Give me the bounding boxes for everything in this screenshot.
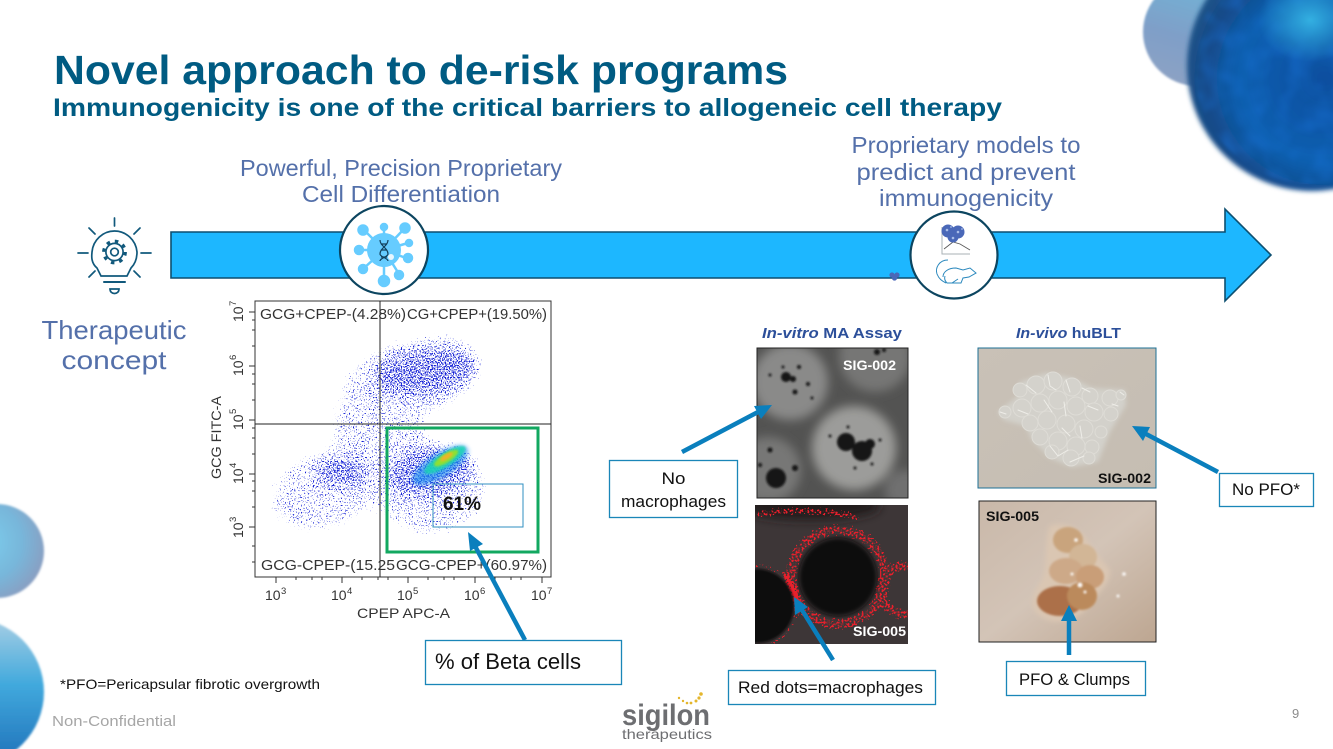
background sphere: left upper xyxy=(0,504,44,598)
label: SIG-005 xyxy=(853,623,906,639)
callout: no PFO: No PFO* xyxy=(1232,480,1300,499)
x axis tick labels: 10 xyxy=(531,587,547,603)
background sphere: top right small xyxy=(1143,0,1251,86)
x axis tick labels: 3 xyxy=(281,586,286,597)
y axis tick labels: 7 xyxy=(228,301,239,306)
title: Novel approach to de-risk programs xyxy=(54,47,788,93)
callout: PFO and clumps xyxy=(1006,662,1146,696)
x axis tick labels: 10 xyxy=(397,587,413,603)
heading: cell differentiation xyxy=(240,155,563,207)
subtitle: Immunogenicity is one of the critical barriers to allogeneic cell therapy xyxy=(53,94,1002,122)
y axis tick labels: 6 xyxy=(228,355,239,360)
callout: PFO and clumps: PFO & Clumps xyxy=(1019,670,1130,689)
arrow: no PFO pointer xyxy=(1132,426,1218,472)
heading: cell differentiation: Cell Differentiation xyxy=(302,181,500,207)
photo: in-vivo SIG-002 xyxy=(978,348,1156,488)
gate labels: GCG-CPEP+(60.97%) xyxy=(396,558,547,574)
panel heading: in-vitro: In-vitro MA Assay xyxy=(762,325,903,342)
callout: red dots xyxy=(728,670,936,704)
x axis tick labels: 10 xyxy=(331,587,347,603)
callout: red dots: Red dots=macrophages xyxy=(738,678,923,697)
green gate xyxy=(387,428,538,552)
y axis tick labels: 10 xyxy=(230,360,246,376)
y axis tick labels: 4 xyxy=(228,463,239,468)
arrow: red dots pointer xyxy=(794,597,833,660)
arrow: PFO and clumps pointer xyxy=(1061,605,1077,655)
icon: virus with DNA xyxy=(340,206,428,294)
photo: in-vitro SIG-002 xyxy=(735,320,925,510)
gate labels: CG+CPEP+(19.50%) xyxy=(407,307,547,323)
icon: light bulb with gear xyxy=(78,218,151,294)
scatter density points xyxy=(252,315,499,553)
callout: no PFO xyxy=(1220,474,1314,506)
flow cytometry chart xyxy=(208,301,552,621)
gate labels: GCG+CPEP-(4.28%) xyxy=(260,307,406,323)
x axis tick labels: 7 xyxy=(547,586,552,597)
confidentiality note: Non-Confidential xyxy=(52,713,176,730)
bead highlights xyxy=(1000,375,1124,462)
y axis tick labels: 10 xyxy=(230,414,246,430)
callout: percent beta cells xyxy=(426,640,622,684)
label: SIG-002 xyxy=(1098,470,1151,486)
icon: model chart and mouse xyxy=(910,212,998,298)
arrow: beta cells pointer xyxy=(468,532,525,640)
heading: proprietary models: predict and prevent xyxy=(856,159,1076,185)
footnote: *PFO=Pericapsular fibrotic overgrowth xyxy=(60,676,320,692)
gate labels xyxy=(260,307,547,574)
x axis tick labels: 10 xyxy=(464,587,480,603)
value box: 61% xyxy=(433,484,523,527)
arrow: no macrophages pointer xyxy=(682,405,772,452)
label: SIG-005 xyxy=(986,508,1039,524)
heading: proprietary models: immunogenicity xyxy=(879,185,1054,211)
background sphere: top right large xyxy=(1187,0,1333,191)
panel heading: in-vivo: In-vivo huBLT xyxy=(1016,325,1121,342)
logo: sigilon therapeutics: sigilon xyxy=(622,699,710,732)
y axis tick labels: 3 xyxy=(228,517,239,522)
x axis title: CPEP APC-A xyxy=(357,605,451,621)
callout: no macrophages xyxy=(610,460,738,518)
y axis tick labels: 10 xyxy=(230,522,246,538)
heading: cell differentiation: Powerful, Precision Proprietary xyxy=(240,155,563,181)
callout: no macrophages: macrophages xyxy=(621,492,726,511)
y axis tick labels: 10 xyxy=(230,306,246,322)
x axis tick labels: 5 xyxy=(413,586,418,597)
density hotspot xyxy=(407,438,474,493)
heading: therapeutic concept xyxy=(42,315,186,375)
gate labels: GCG-CPEP-(15.25 xyxy=(261,558,395,574)
y axis tick labels xyxy=(228,301,246,538)
logo: sigilon therapeutics: therapeutics xyxy=(622,726,712,742)
value box: 61%: 61% xyxy=(443,494,481,515)
y axis tick labels: 5 xyxy=(228,409,239,414)
logo: sigilon therapeutics xyxy=(622,692,712,742)
page number: 9 xyxy=(1292,706,1299,721)
x axis tick labels xyxy=(265,586,552,603)
x axis tick labels: 6 xyxy=(480,586,485,597)
heading: therapeutic concept: Therapeutic xyxy=(42,315,186,345)
heading: proprietary models xyxy=(852,132,1080,211)
x axis tick labels: 4 xyxy=(347,586,352,597)
x axis tick labels: 10 xyxy=(265,587,281,603)
callout: no macrophages: No xyxy=(662,469,686,488)
label: SIG-002 xyxy=(843,357,896,373)
icon: small heart marker on arrow xyxy=(889,272,900,281)
photo: in-vitro SIG-005 xyxy=(717,492,929,646)
timeline arrow xyxy=(171,209,1271,301)
heading: proprietary models: Proprietary models to xyxy=(852,132,1080,158)
callout: percent beta cells: % of Beta cells xyxy=(435,649,581,674)
photo: in-vivo SIG-005 xyxy=(979,501,1156,642)
heading: therapeutic concept: concept xyxy=(62,345,167,375)
y axis tick labels: 10 xyxy=(230,468,246,484)
background sphere: left lower xyxy=(0,618,44,749)
y axis title: GCG FITC-A xyxy=(208,395,224,479)
